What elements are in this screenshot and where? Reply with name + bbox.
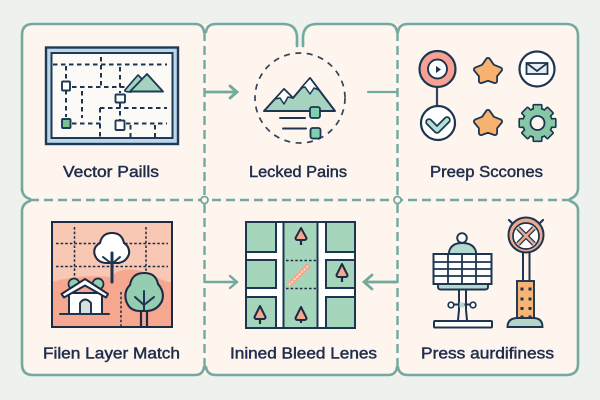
icon: solar panel and sign tower — [434, 218, 544, 328]
icon: house and trees on layered map — [52, 222, 172, 327]
icon: vector path map — [46, 48, 178, 144]
arrow: filter panel to bleed panel — [205, 276, 237, 288]
label: Vector Paills: Vector Paills — [63, 164, 159, 181]
label: Lecked Pains: Lecked Pains — [249, 164, 347, 181]
label: Inined Bleed Lenes: Inined Bleed Lenes — [230, 346, 377, 362]
arrow: press panel to bleed panel — [364, 275, 397, 289]
label: Preep Sccones: Preep Sccones — [430, 164, 543, 181]
arrow: locked panel connector to scenes panel — [368, 91, 397, 93]
icon: green blocks and lanes — [246, 222, 355, 328]
arrow: vector panel to locked panel — [205, 86, 237, 98]
icon: preset score symbols — [420, 51, 555, 140]
label: Press aurdifiness: Press aurdifiness — [421, 346, 554, 362]
label: Filen Layer Match: Filen Layer Match — [43, 346, 180, 362]
icon: mountains in dashed circle — [255, 53, 345, 143]
